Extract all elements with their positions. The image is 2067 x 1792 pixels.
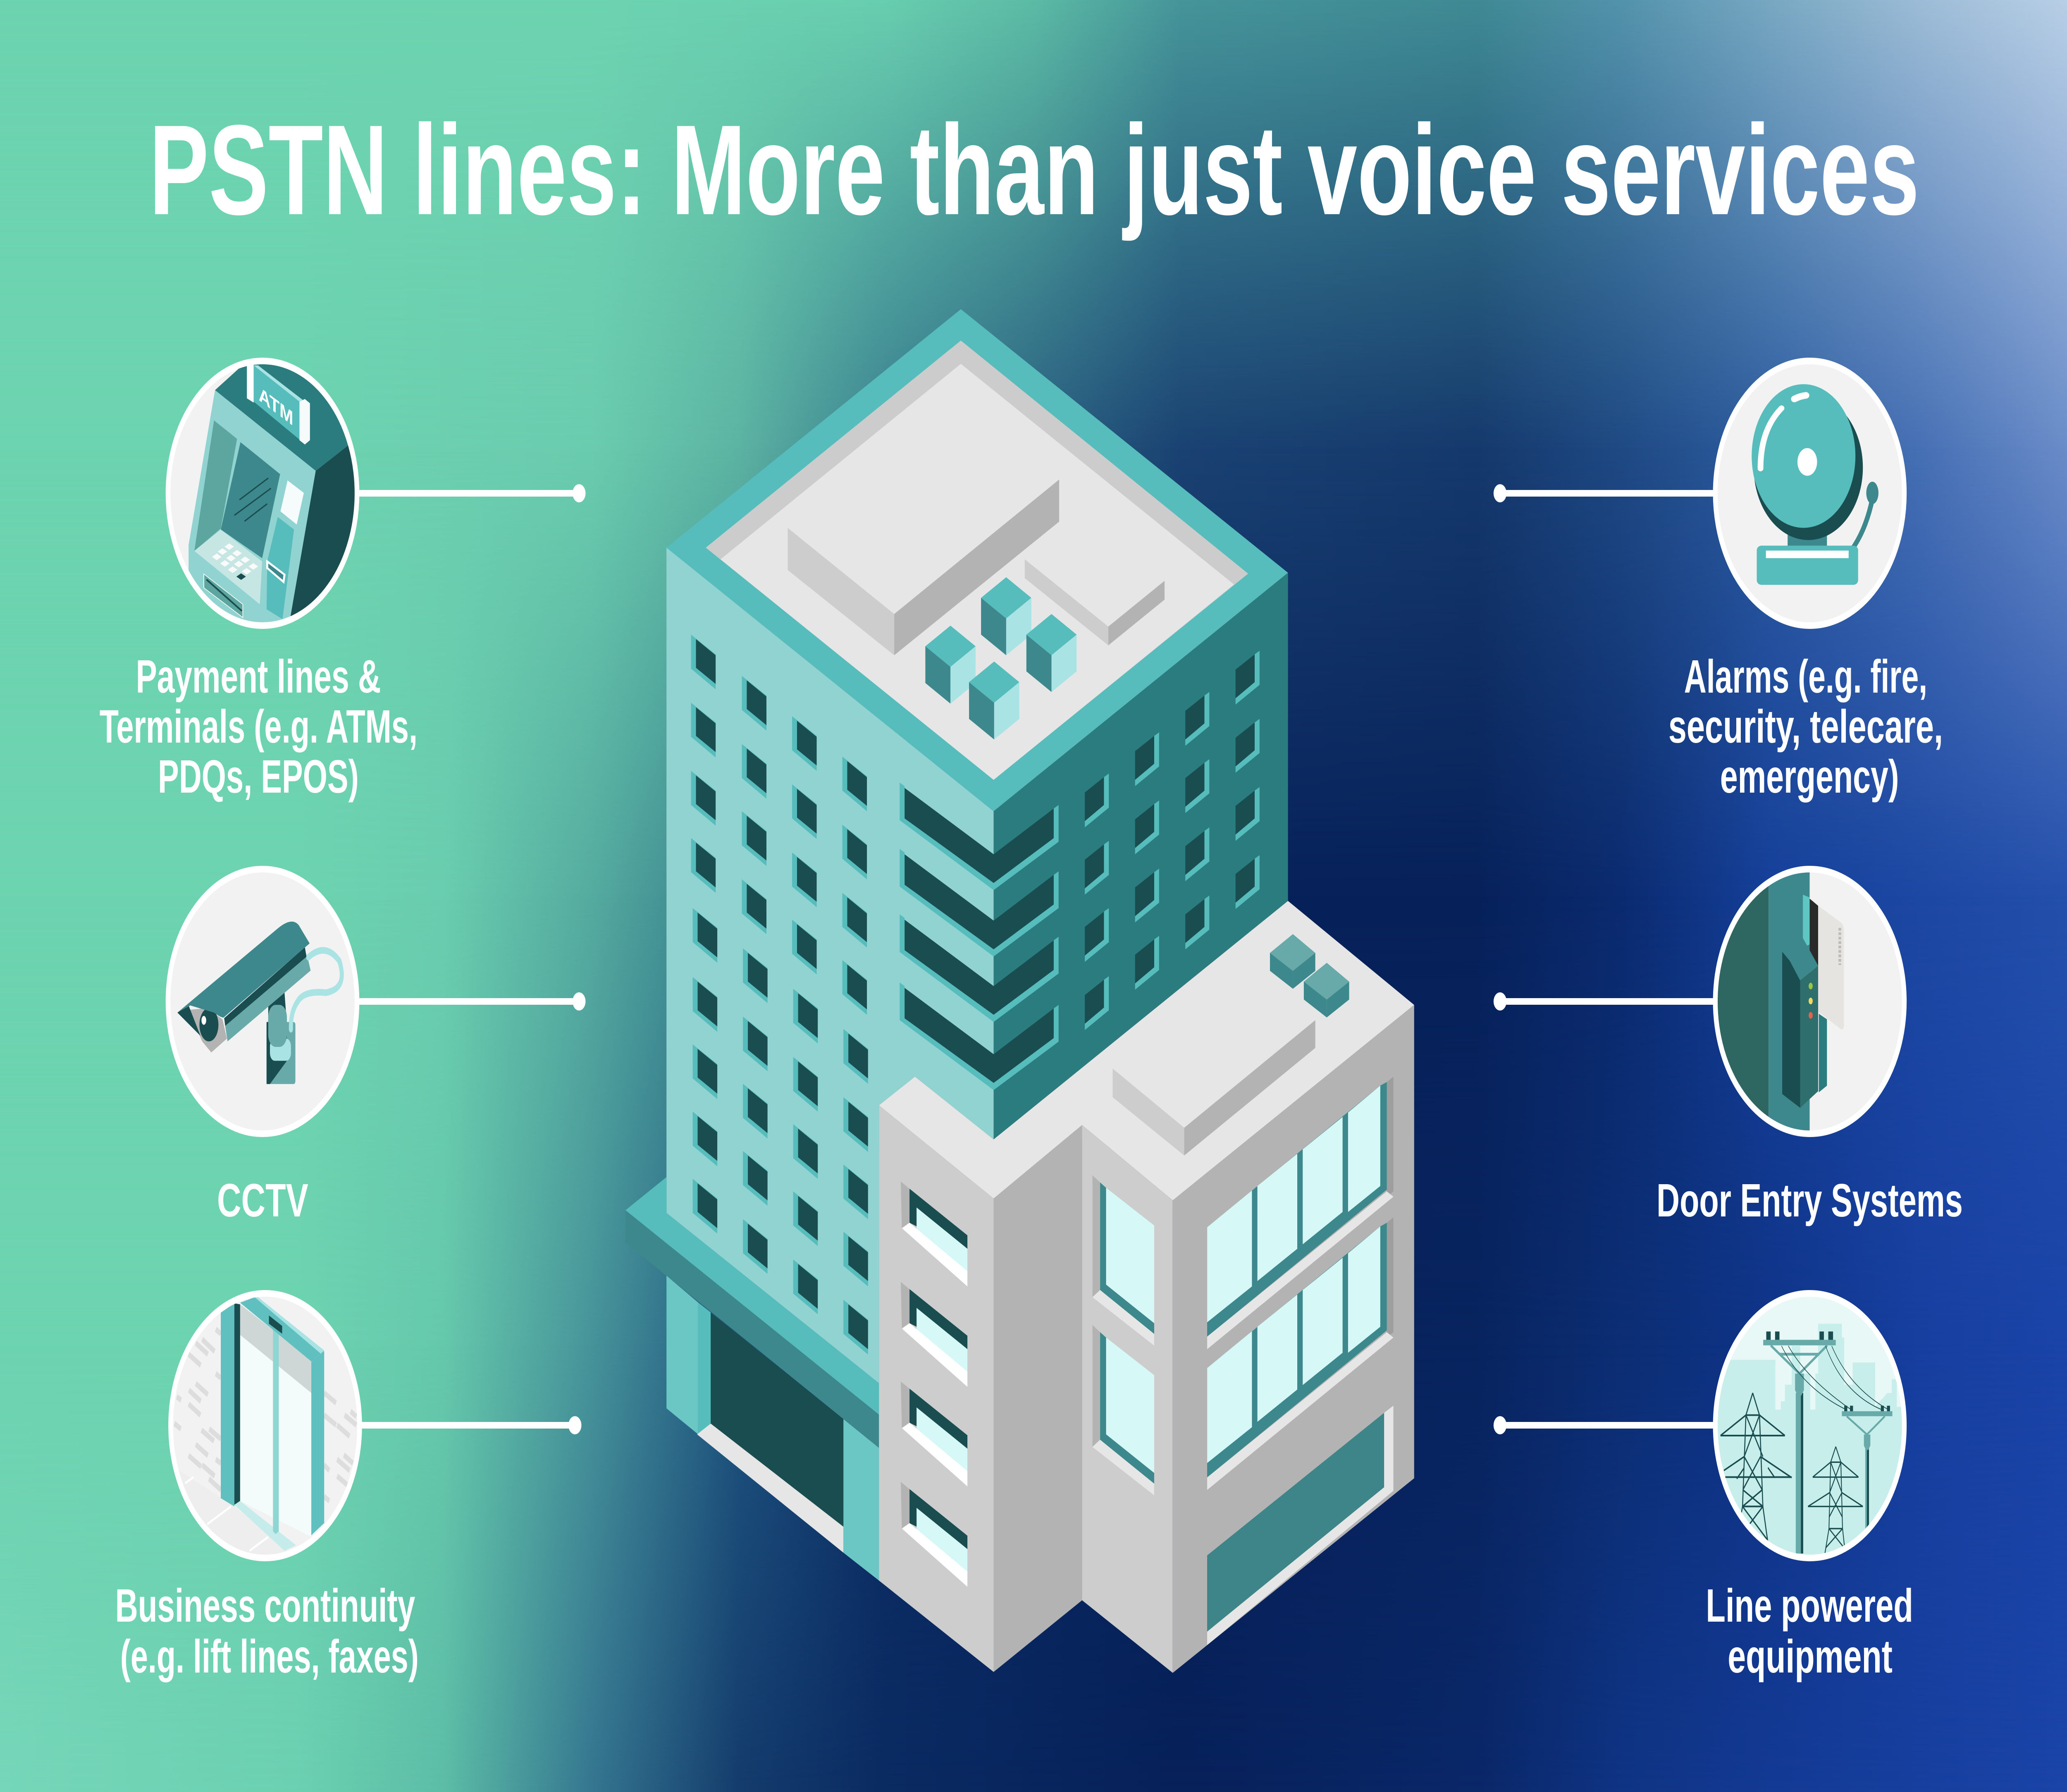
label: payment lines: PDQs, EPOS): [158, 750, 359, 803]
tower left windows: [691, 635, 868, 1355]
low roof block: [1025, 559, 1165, 645]
icon: lift: [167, 1293, 360, 1578]
label: line powered equipment: Line powered: [1706, 1579, 1913, 1632]
entrance: [666, 1276, 879, 1580]
label: line powered equipment: [1706, 1579, 1913, 1682]
connector: alarms: [1494, 484, 1714, 502]
label: alarms: emergency): [1720, 750, 1899, 803]
connector: door entry: [1494, 992, 1714, 1011]
roof rim: [666, 309, 1288, 811]
label: business continuity: Business continuity: [115, 1579, 415, 1632]
canopy: [625, 1177, 879, 1448]
icon: door entry reader: [1710, 864, 1904, 1141]
roof surface: [721, 364, 1234, 780]
title: PSTN lines: More than just voice services: [149, 98, 1919, 242]
label: line powered equipment: equipment: [1728, 1630, 1893, 1682]
label: alarms: security, telecare,: [1668, 700, 1943, 753]
tower right wall: [994, 573, 1288, 1140]
icon: ATM: ATM: [259, 382, 293, 430]
label: alarms: Alarms (e.g. fire,: [1684, 650, 1927, 702]
annex roof block: [1113, 1020, 1315, 1156]
annex shutter: [1207, 1406, 1394, 1645]
icon: CCTV camera: [168, 869, 357, 1134]
label: payment lines: [100, 650, 418, 803]
connector: payment: [357, 484, 585, 502]
connector: line powered: [1494, 1416, 1714, 1434]
label: alarms: [1668, 650, 1943, 803]
annex right windows: [1207, 1077, 1394, 1490]
connector: cctv: [357, 992, 585, 1011]
icon: power lines: [1710, 1293, 1910, 1567]
label: business continuity: [115, 1579, 419, 1682]
annex walls and roof: [879, 901, 1414, 1673]
roof inner shadow: [706, 341, 1248, 780]
annex roof units: [1270, 934, 1349, 1018]
annex left windows: [901, 1182, 967, 1587]
annex middle windows: [1093, 1175, 1154, 1495]
label: payment lines: Payment lines &: [136, 650, 381, 702]
label: business continuity: (e.g. lift lines, faxes): [120, 1630, 419, 1682]
label: payment lines: Terminals (e.g. ATMs,: [100, 700, 418, 753]
rooftop cubes: [925, 577, 1076, 740]
tower left wall: [666, 547, 994, 1383]
label: CCTV: CCTV: [217, 1174, 308, 1226]
connector: business continuity: [360, 1416, 581, 1434]
chevron balconies: [900, 783, 1059, 1090]
icon: bell: [1715, 361, 1904, 626]
icon: ATM: [168, 359, 360, 627]
building illustration: [625, 309, 1414, 1673]
tower right windows: [1085, 651, 1260, 1030]
label: door entry systems: Door Entry Systems: [1656, 1174, 1963, 1226]
roof block: [788, 480, 1059, 655]
